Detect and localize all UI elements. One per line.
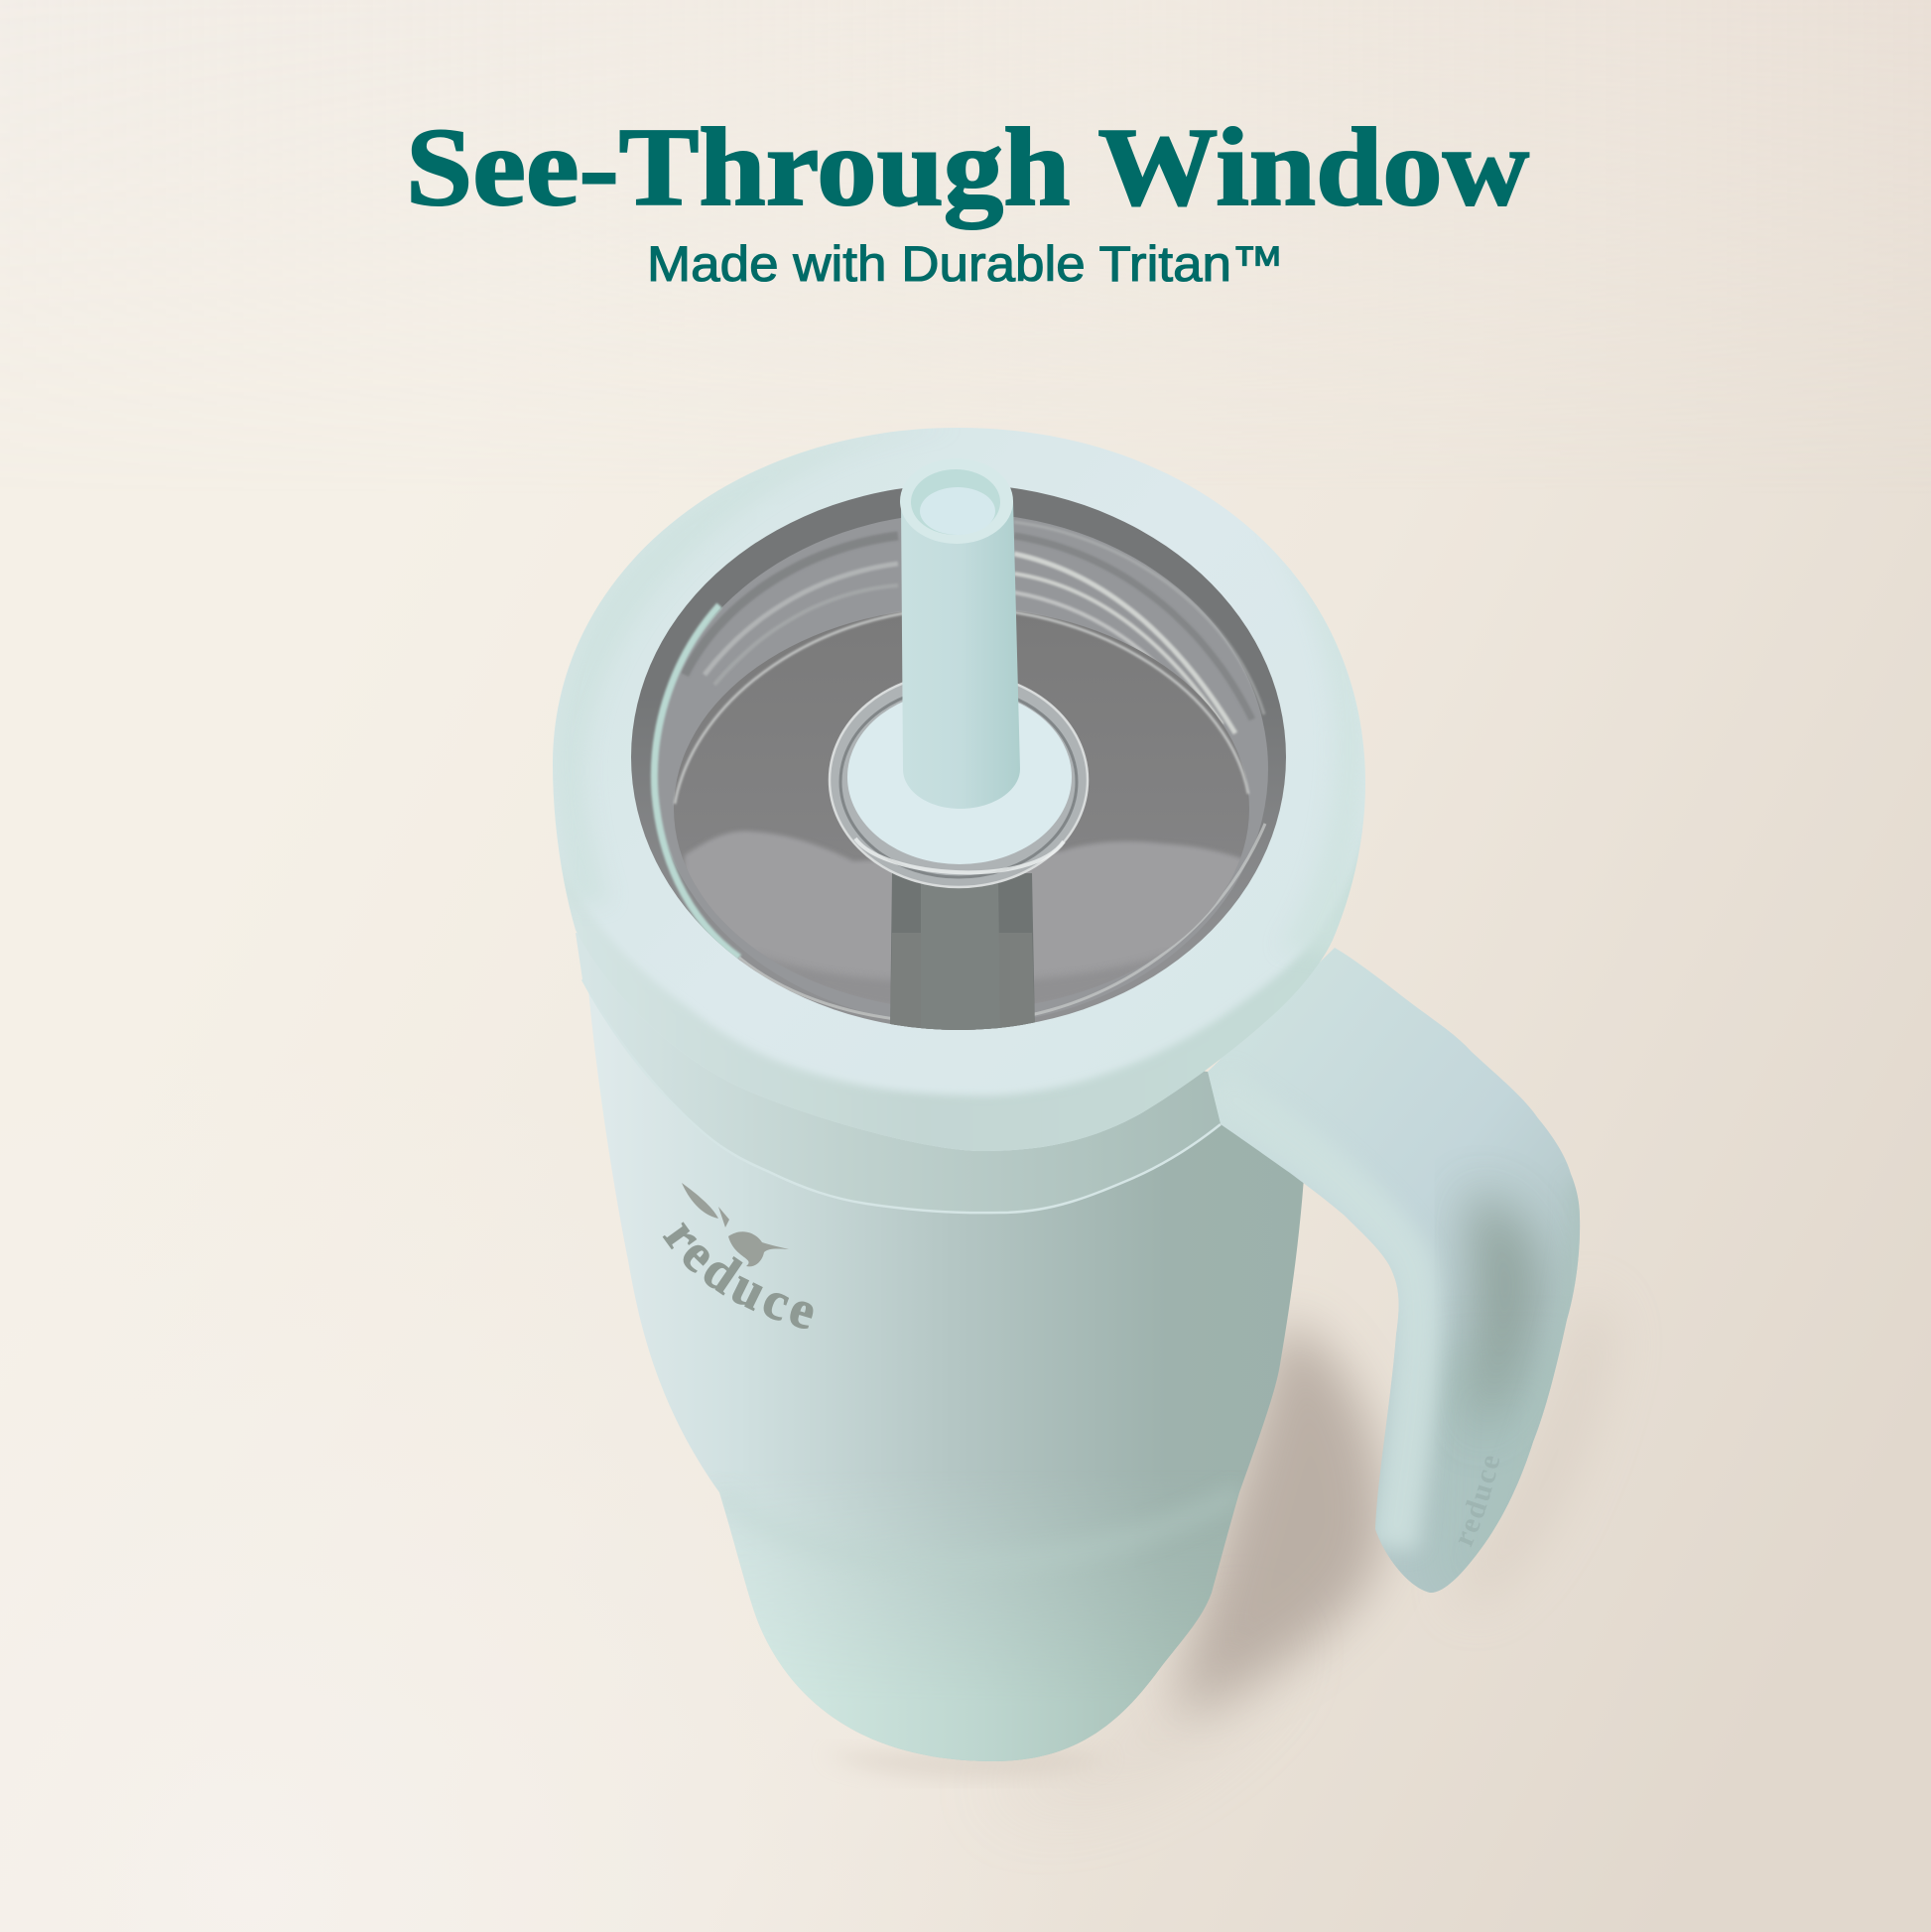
lid outer tint: [568, 784, 592, 891]
handle dark shading: [1469, 1191, 1537, 1439]
handle inner highlight: [1343, 1187, 1445, 1552]
tumbler body: [589, 994, 1304, 1761]
lid rim: [553, 428, 1371, 1171]
see-through window: [631, 484, 1286, 1032]
silicone gasket: [847, 690, 1072, 864]
straw: [900, 458, 1020, 809]
handle: [1208, 948, 1580, 1593]
logo on body: [663, 1183, 814, 1329]
lid lower band: [568, 865, 1356, 1151]
straw reflection: [890, 873, 1035, 1032]
interior cloth reflection: [684, 830, 1240, 982]
straw opening: [900, 458, 1013, 544]
handle outer edge: [1562, 1188, 1580, 1344]
handle embossed wordmark: reduce: [1459, 1457, 1499, 1547]
interior well: [674, 611, 1249, 954]
logo wordmark: reduce: [663, 1223, 814, 1329]
glass thread zone: [657, 517, 1268, 953]
heading: See-Through Window: [406, 106, 1529, 229]
clear ring: [830, 673, 1088, 887]
mint glass edge: [654, 605, 739, 958]
collar band: [576, 933, 1221, 1213]
cast shadow: [824, 1290, 1612, 1797]
subheading: Made with Durable Tritan™: [647, 236, 1284, 292]
logo bird mark: [682, 1183, 789, 1266]
straw gasket and ring: [830, 673, 1088, 887]
handle lower tone: [1435, 1385, 1552, 1592]
